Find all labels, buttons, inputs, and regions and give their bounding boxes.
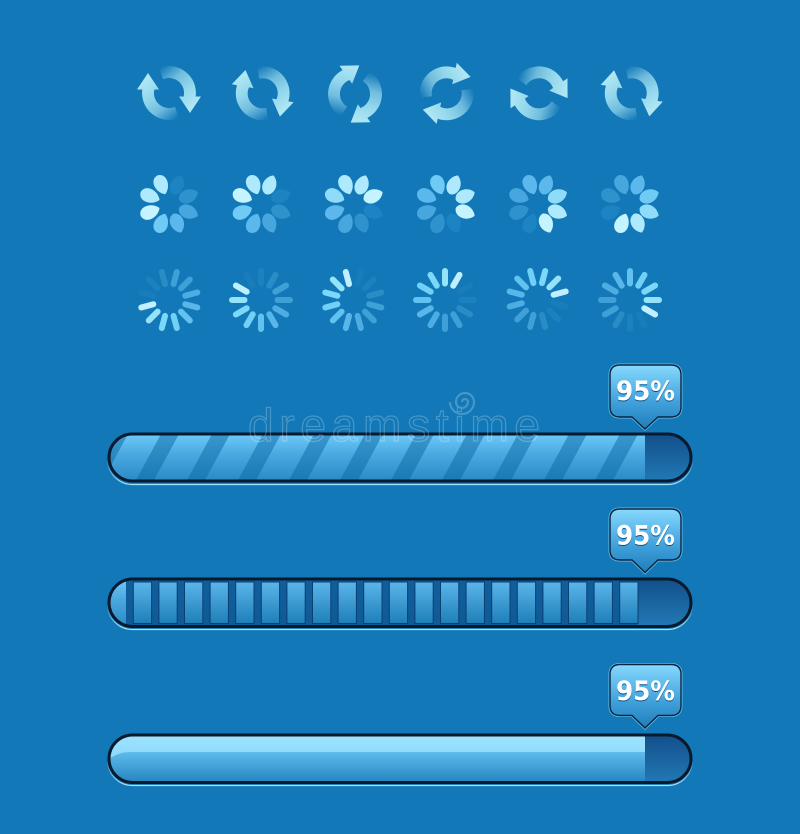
- icon: tick spinner 3: [322, 268, 385, 332]
- tooltip 1: 95%: 95%: [616, 376, 675, 407]
- icon: arrows 1: [137, 66, 201, 120]
- tooltip 2: 95%: [610, 509, 681, 572]
- tooltip 2: 95%: 95%: [616, 522, 675, 552]
- icon: arrows 6: [596, 62, 668, 125]
- icon: arrows 5: [497, 53, 581, 134]
- icon: arrows 4: [414, 56, 480, 130]
- icon: petal spinner 4: [415, 173, 477, 235]
- icon: arrows 3: [315, 52, 395, 136]
- tooltip 2: 95%: 95%: [616, 520, 675, 551]
- icon: tick spinner 6: [598, 268, 662, 332]
- progress bar 1: striped: [84, 430, 692, 485]
- icon: tick spinner 4: [413, 268, 477, 332]
- icon: petal spinner 2: [230, 173, 293, 235]
- progress bar 2: segmented: [100, 575, 692, 630]
- row of tick spinners: [138, 267, 662, 332]
- watermark: dreamstime: [248, 399, 540, 451]
- icon: arrows 2: [226, 61, 299, 125]
- icon: petal spinner 3: [323, 173, 385, 235]
- icon: tick spinner 2: [229, 268, 293, 332]
- icon: petal spinner 6: [599, 173, 661, 235]
- tooltip 3: 95%: 95%: [616, 676, 675, 707]
- tooltip 1: 95%: [610, 365, 681, 429]
- icon: tick spinner 5: [506, 267, 569, 331]
- tooltip 3: 95%: 95%: [616, 677, 675, 708]
- icon: petal spinner 1: [138, 173, 201, 235]
- tooltip 3: 95%: [610, 664, 681, 728]
- icon: tick spinner 1: [138, 268, 201, 332]
- row of circular arrow icons: [137, 52, 668, 136]
- tooltip 1: 95%: 95%: [616, 377, 675, 408]
- progress bar 3: glossy: [100, 732, 692, 786]
- icon: petal spinner 5: [507, 173, 570, 235]
- segments: [133, 582, 638, 624]
- row of petal spinners: [138, 173, 661, 235]
